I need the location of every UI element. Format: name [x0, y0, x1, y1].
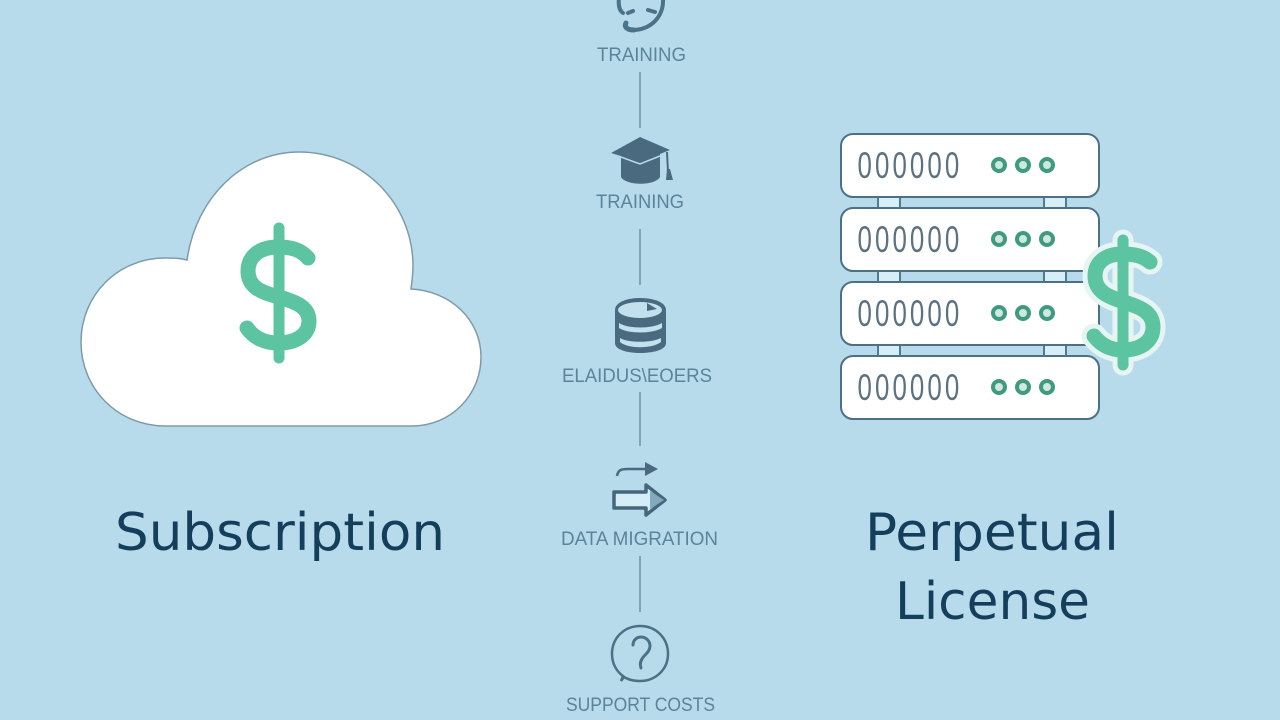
- connector 3: [639, 392, 641, 446]
- label: training: TRAINING: [596, 192, 684, 213]
- connector 4: [639, 556, 641, 612]
- server unit 2: [841, 208, 1099, 271]
- panel: hidden costs timeline: [561, 0, 718, 716]
- rack connectors: [878, 197, 1066, 356]
- server unit 3: [841, 282, 1099, 345]
- label: cloud users: ELAIDUS\EOERS: [562, 366, 712, 387]
- icon: graduation cap: [611, 137, 673, 184]
- server unit 3: 000000: [858, 292, 962, 334]
- icon: dollar badge: [1094, 240, 1153, 365]
- heading: subscription: Subscription: [115, 503, 445, 563]
- label: data migration: DATA MIGRATION: [561, 529, 718, 550]
- heading: perpetual license: Perpetual: [865, 503, 1119, 563]
- server unit 2: 000000: [858, 218, 962, 260]
- icon: headset: [619, 0, 663, 30]
- label: training: TRAINING: [597, 45, 686, 66]
- server unit 4: [841, 356, 1099, 419]
- server unit 1: 000000: [858, 144, 962, 186]
- server unit 1: [841, 134, 1099, 197]
- icon: server rack: [841, 134, 1099, 419]
- server unit 4: 000000: [858, 366, 962, 408]
- connector 1: [639, 72, 641, 128]
- connector 2: [639, 229, 641, 285]
- icon: database: [615, 298, 666, 353]
- icon: data migration arrows: [614, 462, 665, 515]
- heading: perpetual license: License: [895, 572, 1090, 632]
- icon: cloud with dollar: [81, 152, 481, 426]
- panel: subscription: [81, 152, 481, 563]
- label: support costs: SUPPORT COSTS: [566, 695, 715, 716]
- icon: question bubble: [612, 626, 668, 681]
- panel: perpetual license: [841, 134, 1153, 632]
- heading: perpetual license: [865, 503, 1119, 632]
